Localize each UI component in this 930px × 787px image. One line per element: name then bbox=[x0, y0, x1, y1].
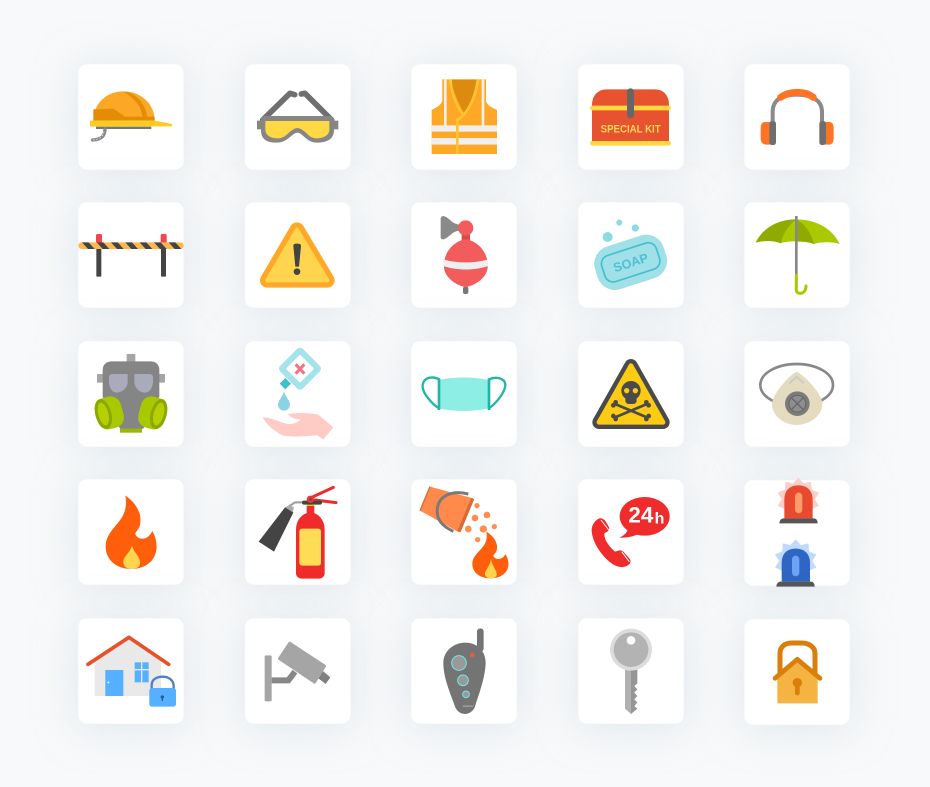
panel: key bbox=[578, 618, 684, 724]
panel: fire extinguisher bbox=[245, 479, 351, 585]
icon: umbrella bbox=[756, 216, 840, 293]
panel: walkie remote bbox=[411, 618, 517, 724]
panel: ear defenders bbox=[744, 64, 850, 170]
panel: 24h phone bbox=[578, 479, 684, 585]
icon: security camera bbox=[265, 643, 330, 701]
icon: flame bbox=[106, 496, 157, 569]
panel: house padlock bbox=[744, 619, 850, 725]
panel: safety vest bbox=[411, 64, 517, 170]
panel: poison sign bbox=[578, 341, 684, 447]
icon: house padlock bbox=[775, 643, 820, 703]
panel: flame bbox=[78, 479, 184, 585]
panel: dust respirator bbox=[744, 341, 850, 447]
icon: warning sign bbox=[267, 230, 327, 280]
icon: air horn bbox=[441, 216, 488, 294]
icon: hard hat bbox=[90, 91, 172, 140]
icon: face mask bbox=[423, 377, 505, 411]
icon: locked house bbox=[88, 637, 176, 707]
icon: ear defenders bbox=[761, 92, 834, 145]
icon: key bbox=[610, 629, 652, 714]
panel: umbrella bbox=[744, 202, 850, 308]
icon: poison sign bbox=[599, 366, 663, 422]
panel: warning beacons bbox=[744, 478, 850, 587]
panel: hand sanitizer bbox=[245, 341, 351, 447]
icon: fire extinguisher bbox=[259, 487, 336, 579]
panel: security camera bbox=[245, 618, 351, 724]
panel: locked house bbox=[78, 618, 184, 724]
icon: soap: SOAP bbox=[612, 251, 651, 275]
icon: road barrier bbox=[78, 234, 184, 277]
panel: safety goggles bbox=[245, 64, 351, 170]
panel: road barrier bbox=[78, 202, 184, 308]
panel: air horn bbox=[411, 202, 517, 308]
panel: gas mask bbox=[78, 341, 184, 447]
icon: hand sanitizer bbox=[263, 346, 333, 439]
icon: dust respirator bbox=[760, 364, 833, 425]
panel: soap bbox=[578, 202, 684, 308]
icon: 24h phone: h bbox=[655, 510, 664, 527]
icon: bucket over flame bbox=[420, 487, 509, 578]
panel: special kit chest bbox=[578, 64, 684, 170]
icon: 24h phone: 24 bbox=[628, 503, 654, 528]
icon: warning beacons bbox=[776, 478, 818, 587]
panel: hard hat bbox=[78, 64, 184, 170]
icon: 24h phone bbox=[592, 497, 670, 567]
icon: safety vest bbox=[432, 79, 497, 154]
icon: gas mask bbox=[92, 354, 170, 433]
panel: face mask bbox=[411, 341, 517, 447]
icon: walkie remote bbox=[443, 628, 486, 714]
icon: special kit chest: SPECIAL KIT bbox=[601, 124, 661, 136]
icon: safety goggles bbox=[257, 93, 338, 143]
panel: sand on fire bbox=[411, 479, 517, 585]
panel: warning sign bbox=[245, 202, 351, 308]
